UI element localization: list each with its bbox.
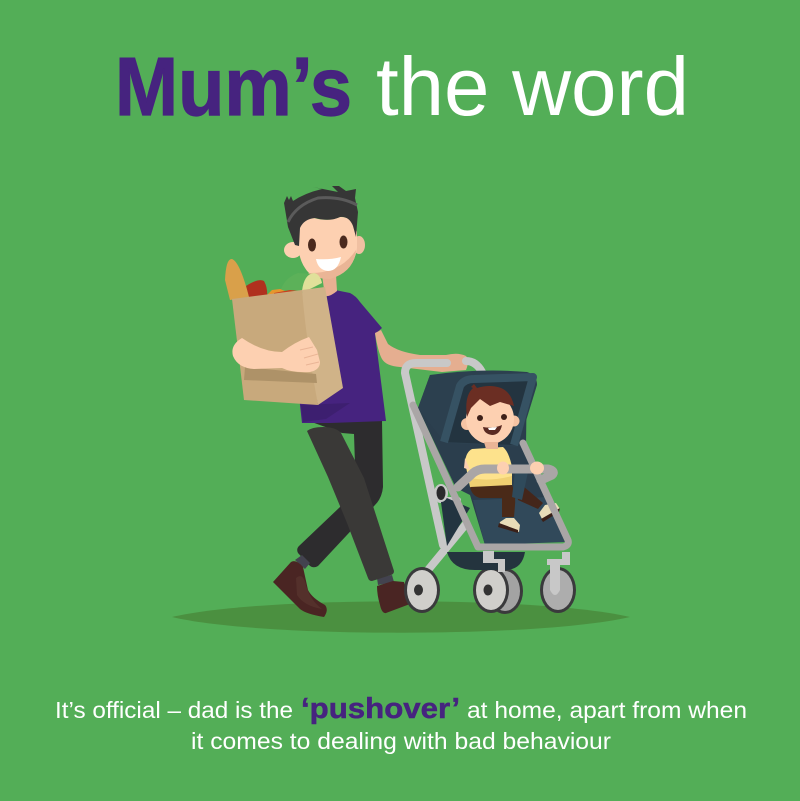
bag contents (225, 259, 322, 300)
seat panel (473, 497, 565, 545)
seat back (418, 372, 560, 545)
child face (466, 394, 514, 444)
child arm (464, 458, 470, 470)
right wheel (540, 565, 576, 613)
dad hair (284, 186, 358, 246)
dad right arm (375, 330, 468, 372)
red produce (274, 290, 300, 296)
dad front leg (307, 427, 394, 581)
caption: It’s official – dad is the (55, 697, 293, 723)
child shirt shadow (470, 476, 512, 488)
child shoes (498, 503, 560, 533)
child far leg (516, 486, 543, 509)
canopy (418, 371, 537, 447)
dad smile (316, 257, 341, 271)
caption: at home, apart from when (467, 697, 747, 723)
caption: ‘pushover’ (301, 693, 460, 725)
dad eyes (308, 236, 348, 252)
pivot hub (434, 484, 448, 502)
front bar (458, 469, 553, 487)
child eyes (477, 414, 507, 421)
dad neck (322, 275, 337, 296)
dad back leg (297, 420, 383, 567)
caption (55, 693, 747, 754)
illustration: dad with groceries (225, 186, 468, 617)
ground shadow (172, 601, 630, 633)
pepper (246, 280, 267, 298)
dad socks (295, 555, 394, 585)
illustration: stroller with child (404, 361, 576, 614)
dad jaw shadow (308, 250, 356, 279)
orange produce (266, 289, 290, 299)
leek (302, 273, 322, 292)
baguette (225, 259, 249, 300)
child hair (466, 384, 514, 417)
dad right shoe (377, 581, 410, 613)
child ears (461, 416, 520, 430)
child shirt (465, 447, 512, 487)
title: Mum’s (115, 40, 352, 133)
child mouth (483, 425, 502, 435)
paper bag (232, 287, 343, 405)
dad left shoe (273, 561, 327, 617)
child neck (484, 442, 498, 449)
seat frame (413, 405, 568, 547)
lower basket (447, 552, 525, 570)
title: the word (376, 40, 689, 133)
dad face (298, 217, 357, 278)
rear fabric (440, 495, 470, 546)
green leaves (280, 273, 318, 292)
child near leg (470, 485, 515, 517)
front wheel stem (483, 551, 570, 595)
child hands (497, 462, 544, 474)
dad ears (284, 236, 365, 258)
dad hugging arm (232, 337, 320, 372)
stroller handle and rear frame (405, 361, 482, 570)
title (115, 40, 689, 133)
left wheel (404, 567, 440, 613)
caption: it comes to dealing with bad behaviour (191, 728, 611, 754)
child (461, 384, 560, 533)
crotch strap (512, 472, 528, 500)
back wheel pair (473, 567, 523, 614)
dad t-shirt (295, 290, 386, 423)
